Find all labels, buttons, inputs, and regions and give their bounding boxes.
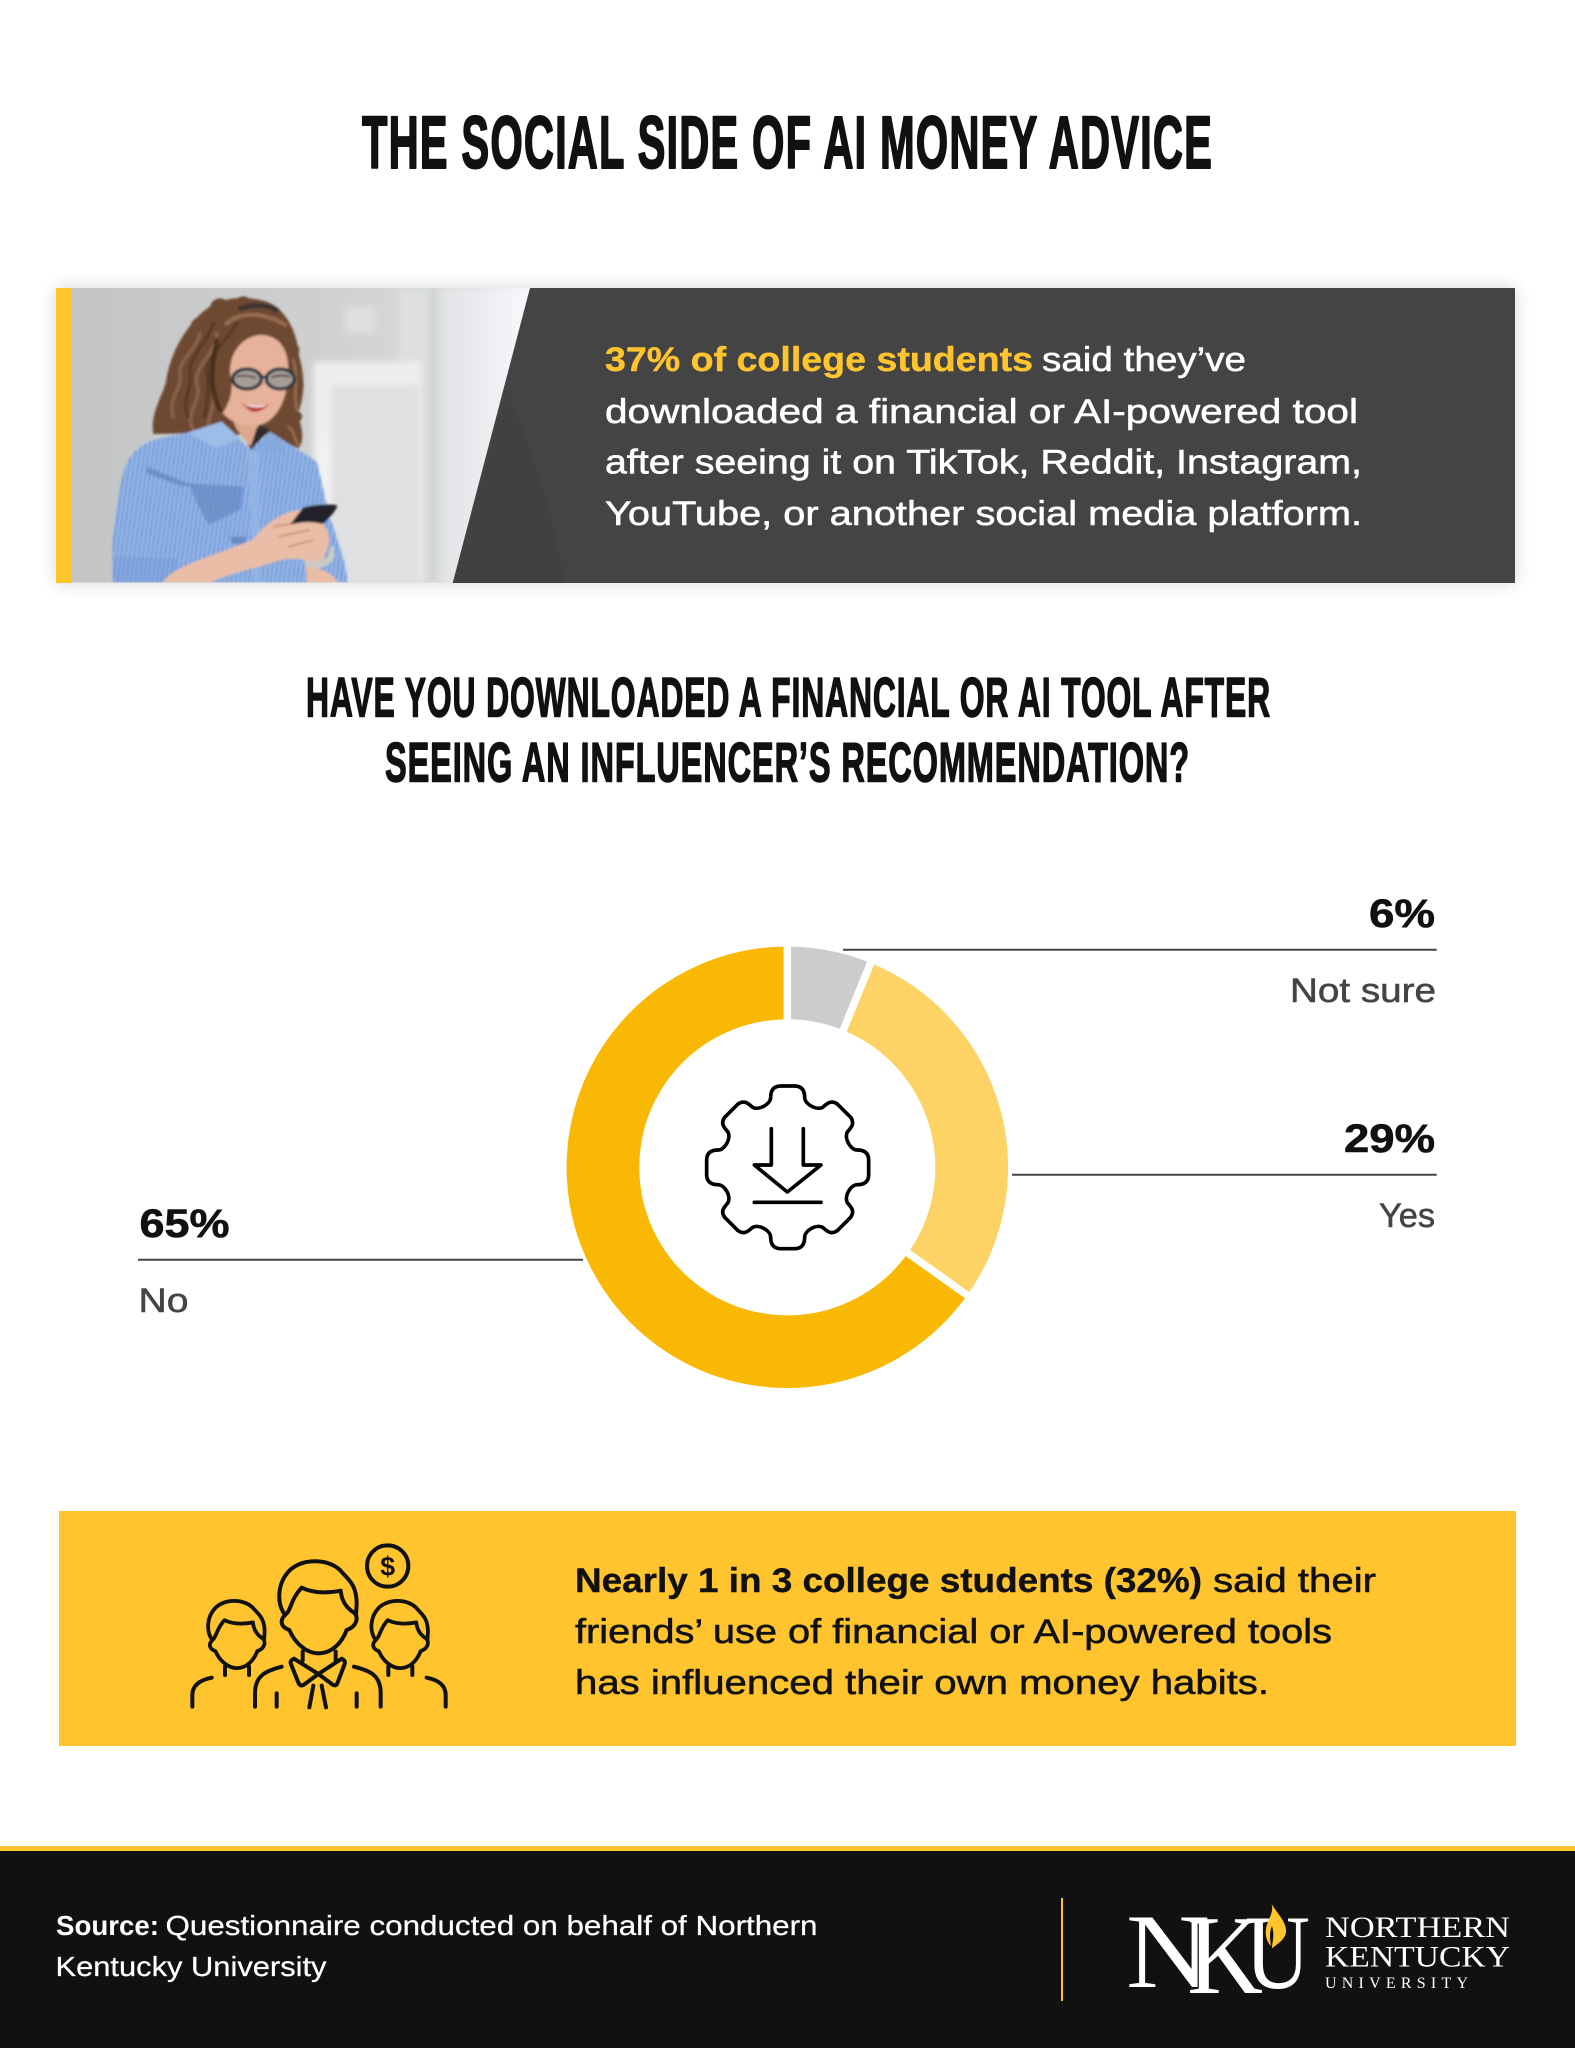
- callout text: Nearly 1 in 3 college students (32%): [575, 1562, 1202, 1600]
- label: 6% not sure: 6%: [1369, 892, 1435, 936]
- panel: friends influence callout: [59, 1511, 1516, 1746]
- donut chart: [138, 892, 1437, 1352]
- logo: Northern Kentucky University: NORTHERN: [1325, 1911, 1510, 1944]
- footer: [0, 1846, 1575, 2048]
- banner text: said they’ve: [1042, 341, 1246, 379]
- label: 65% no: [138, 1202, 583, 1320]
- icon: gear with download arrow: [707, 1086, 869, 1249]
- icon: three people with dollar coin: $: [380, 1551, 395, 1581]
- logo: Northern Kentucky University: [1126, 1893, 1510, 2018]
- label: 29% yes: Yes: [1379, 1197, 1435, 1235]
- hair base: [153, 298, 303, 448]
- label: 65% no: No: [138, 1282, 188, 1320]
- logo: Northern Kentucky University: U: [1245, 1894, 1310, 2011]
- logo: Northern Kentucky University: K: [1187, 1894, 1263, 2018]
- neck and face: [232, 420, 260, 448]
- donut segments: [603, 938, 973, 1352]
- logo: Northern Kentucky University: KENTUCKY: [1325, 1940, 1510, 1974]
- banner text: after seeing it on TikTok, Reddit, Instagram,: [605, 444, 1362, 482]
- callout text: friends’ use of financial or AI-powered tools: [575, 1613, 1332, 1651]
- label: 6% not sure: Not sure: [1290, 972, 1436, 1010]
- logo: Northern Kentucky University: N: [1126, 1893, 1210, 2010]
- label: 65% no: 65%: [140, 1202, 230, 1246]
- source note: Kentucky University: [56, 1951, 326, 1982]
- dark text background: [453, 288, 1515, 583]
- banner text: [605, 341, 1362, 533]
- source note: [56, 1910, 818, 1982]
- callout text: [575, 1562, 1376, 1702]
- label: 6% not sure: [843, 892, 1437, 1010]
- chart heading: [306, 666, 1271, 794]
- icon: three people with dollar coin: [192, 1545, 446, 1707]
- banner text: 37% of college students: [605, 341, 1033, 379]
- glasses: [233, 369, 294, 389]
- source note: Source:: [56, 1910, 159, 1941]
- callout text: said their: [1213, 1562, 1376, 1600]
- label: 29% yes: 29%: [1344, 1117, 1435, 1161]
- shirt: [112, 422, 347, 583]
- photo: woman using phone: [71, 288, 538, 585]
- banner text: YouTube, or another social media platform.: [605, 495, 1362, 533]
- arms and hands: [163, 509, 337, 583]
- callout text: has influenced their own money habits.: [575, 1664, 1269, 1702]
- panel: 37% statistic banner: [56, 288, 1515, 585]
- banner text: downloaded a financial or AI-powered tool: [605, 393, 1358, 431]
- logo: Northern Kentucky University: UNIVERSITY: [1325, 1975, 1468, 1992]
- source note: Questionnaire conducted on behalf of Northern: [166, 1910, 818, 1941]
- label: 29% yes: [1012, 1117, 1437, 1235]
